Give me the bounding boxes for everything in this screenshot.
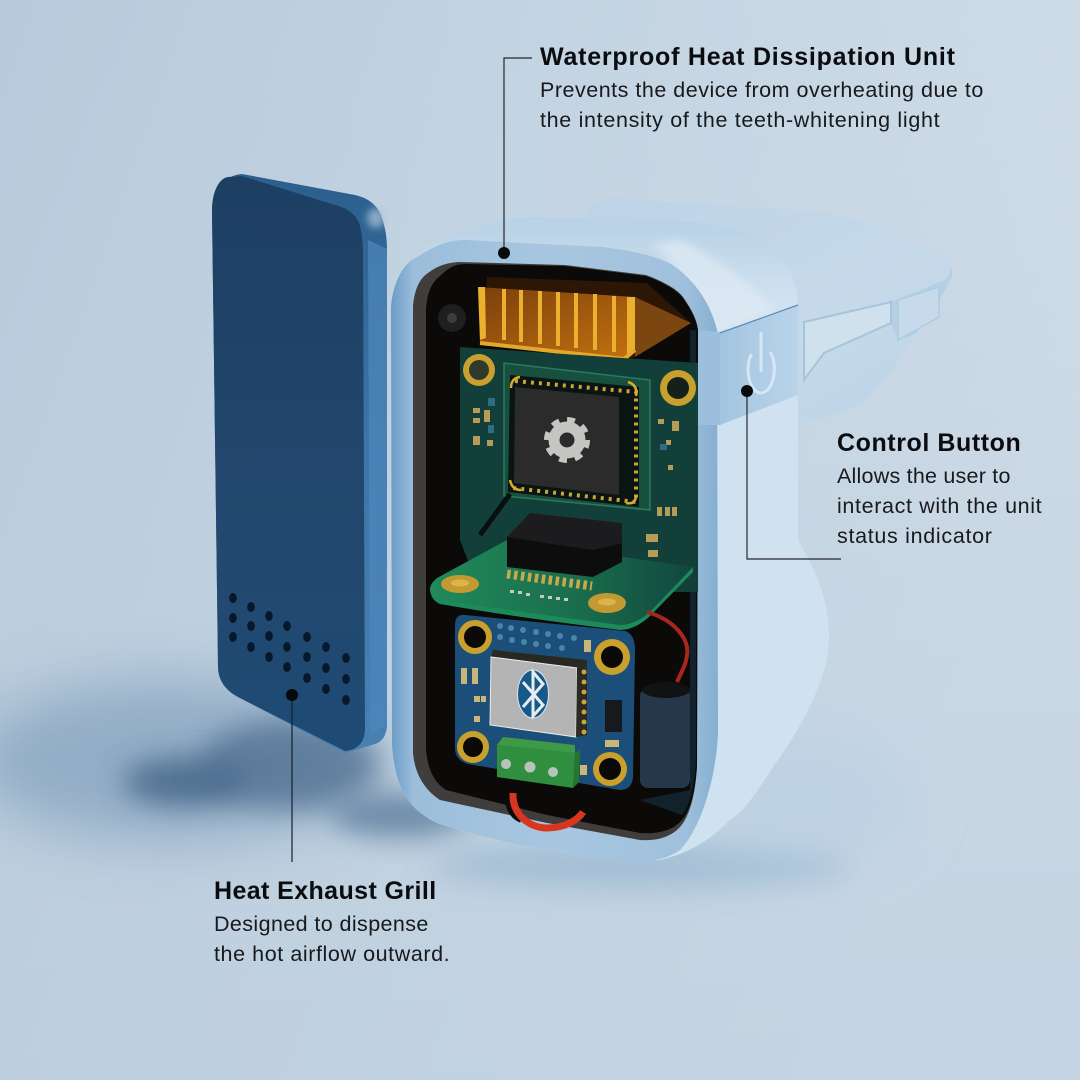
callout: Waterproof Heat Dissipation Unit: Waterproof Heat Dissipation Unit [540, 43, 956, 71]
callout: Control Button: Allows the user to [837, 464, 1011, 488]
icon: gold heat sink [478, 277, 691, 360]
shadow on floor [0, 680, 910, 889]
leader line: exhaust grill [286, 689, 298, 862]
leader line: control button [741, 385, 841, 559]
upper circuit board [460, 347, 698, 592]
callout: Heat Exhaust Grill: the hot airflow outward. [214, 942, 450, 966]
control band [698, 305, 798, 425]
leader line: heat dissipation [498, 58, 532, 259]
callout: Control Button: interact with the unit [837, 494, 1042, 518]
band continued over rim [698, 330, 720, 425]
dark opening [413, 262, 698, 840]
device body [391, 217, 829, 862]
callout: Control Button: Control Button [837, 429, 1021, 457]
middle circuit board [430, 513, 693, 630]
front rim [391, 240, 718, 862]
icon: transparent mouthpiece tray [585, 198, 952, 422]
callout: Waterproof Heat Dissipation Unit: Prevents the device from overheating due to [540, 78, 984, 102]
icon: bluetooth [518, 670, 548, 718]
callout: Heat Exhaust Grill: Heat Exhaust Grill [214, 877, 437, 905]
callout: Waterproof Heat Dissipation Unit [540, 43, 984, 132]
icon: power symbol [748, 332, 774, 393]
callout: Control Button [837, 429, 1042, 548]
screw [438, 304, 466, 332]
callout: Waterproof Heat Dissipation Unit: the intensity of the teeth-whitening light [540, 108, 940, 132]
icon: gear [547, 420, 587, 460]
lower bluetooth board [455, 615, 635, 790]
grill holes [229, 593, 350, 705]
callout: Control Button: status indicator [837, 524, 993, 548]
panel: exhaust door with grill [212, 174, 387, 753]
callout: Heat Exhaust Grill [214, 877, 450, 966]
capacitor and wires [510, 612, 690, 828]
callout: Heat Exhaust Grill: Designed to dispense [214, 912, 429, 936]
